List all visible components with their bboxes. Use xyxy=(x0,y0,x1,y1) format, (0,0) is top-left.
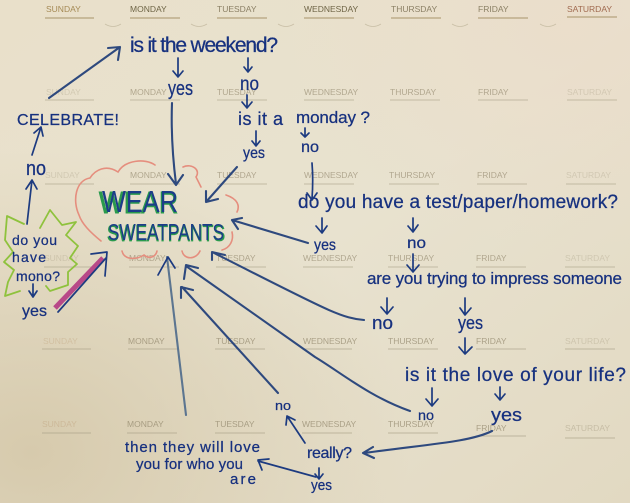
calendar weekday header rows: THURSDAY xyxy=(391,4,437,14)
answer: love yes: yes xyxy=(491,405,522,425)
question: love of your life: is it the love of your life? xyxy=(405,365,626,386)
calendar weekday header rows: TUESDAY xyxy=(216,336,256,346)
question: is it the weekend: is it the weekend? xyxy=(130,34,278,57)
calendar weekday header rows: WEDNESDAY xyxy=(304,87,358,97)
title: wear sweatpants: WEAR xyxy=(102,184,178,219)
calendar weekday header rows: SUNDAY xyxy=(44,253,79,263)
question: do you have mono: mono? xyxy=(16,268,60,284)
answer: love no: no xyxy=(418,407,434,423)
calendar weekday header rows: TUESDAY xyxy=(216,253,256,263)
answer: impress yes: yes xyxy=(458,313,483,333)
calendar weekday header rows: MONDAY xyxy=(128,336,165,346)
calendar weekday header rows: FRIDAY xyxy=(478,87,509,97)
calendar weekday header rows: TUESDAY xyxy=(217,4,257,14)
question: do you have mono xyxy=(12,232,60,284)
calendar weekday header rows: SUNDAY xyxy=(46,87,81,97)
question: is it a monday xyxy=(238,108,370,129)
arrow: love no to sweatpants xyxy=(184,265,410,411)
calendar weekday header rows: SUNDAY xyxy=(45,170,80,180)
arrow: weekend yes to sweatpants xyxy=(168,103,183,185)
calendar weekday header rows xyxy=(42,4,617,438)
arrows: short down arrows xyxy=(29,58,505,479)
calendar weekday header rows: WEDNESDAY xyxy=(304,4,358,14)
text: then they will love you for who you are: you for who you xyxy=(136,456,243,473)
arrow: really no to sweatpants xyxy=(181,287,278,393)
title: wear sweatpants xyxy=(99,184,225,246)
question: really: really? xyxy=(307,445,352,462)
text: then they will love you for who you are xyxy=(125,439,260,488)
calendar weekday header rows: FRIDAY xyxy=(476,253,507,263)
title: wear sweatpants: SWEATPANTS xyxy=(107,220,225,246)
calendar weekday header rows: THURSDAY xyxy=(388,419,434,429)
calendar weekday header rows: SUNDAY xyxy=(43,336,78,346)
title: wear sweatpants: WEAR xyxy=(99,185,178,220)
pink cloud outline xyxy=(76,161,238,258)
calendar weekday header rows: SATURDAY xyxy=(565,336,610,346)
arrow: monday no to do you have xyxy=(307,163,317,200)
calendar weekday header rows: FRIDAY xyxy=(478,4,509,14)
arrow: then they will to sweatpants xyxy=(158,257,186,415)
calendar weekday header rows: MONDAY xyxy=(130,87,167,97)
calendar weekday header rows: THURSDAY xyxy=(388,253,434,263)
arrow: homework yes to sweatpants xyxy=(232,218,308,243)
calendar weekday header rows: SATURDAY xyxy=(565,253,610,263)
calendar weekday header rows: SATURDAY xyxy=(565,423,610,433)
arrow: love yes to really xyxy=(363,431,492,458)
calendar weekday header rows: FRIDAY xyxy=(476,423,507,433)
title: wear sweatpants: SWEATPANTS xyxy=(108,219,224,245)
answer: homework yes: yes xyxy=(314,237,336,254)
text: then they will love you for who you are: then they will love xyxy=(125,439,260,456)
text: then they will love you for who you are: are xyxy=(230,471,256,488)
arrow: mono to no xyxy=(26,180,37,224)
answer: really no: no xyxy=(275,398,291,413)
arrow: really yes to they will love you xyxy=(258,459,316,477)
question: is it a monday: monday ? xyxy=(296,108,370,127)
calendar weekday header rows: WEDNESDAY xyxy=(302,419,356,429)
calendar weekday header rows: MONDAY xyxy=(130,4,167,14)
answer: weekend yes: yes xyxy=(168,78,193,100)
question: do you have mono: have xyxy=(12,249,46,265)
calendar weekday header rows: THURSDAY xyxy=(390,87,436,97)
arrow: celebrate to is it the weekend xyxy=(49,47,120,98)
arrow: no to celebrate xyxy=(32,127,43,155)
answer: mono yes: yes xyxy=(22,303,47,320)
arrow: monday yes to sweatpants xyxy=(206,167,237,202)
calendar weekday header rows: SUNDAY xyxy=(46,4,81,14)
arrow: mono yes to sweatpants xyxy=(55,252,107,312)
answer: impress no: no xyxy=(372,313,393,333)
answer: really yes: yes xyxy=(311,477,332,494)
arrow: impress no to sweatpants xyxy=(212,252,364,320)
answer: homework no: no xyxy=(407,235,426,252)
question: test paper homework: do you have a test/paper/homework? xyxy=(298,192,618,213)
calendar weekday header rows: SATURDAY xyxy=(566,170,611,180)
calendar weekday header rows: MONDAY xyxy=(130,170,167,180)
calendar weekday header rows: FRIDAY xyxy=(477,170,508,180)
calendar weekday header rows: SATURDAY xyxy=(567,87,612,97)
question: impress someone: are you trying to impress someone xyxy=(367,269,622,288)
calendar weekday header rows: TUESDAY xyxy=(217,87,257,97)
calendar weekday header rows: FRIDAY xyxy=(476,336,507,346)
answer: mono no: no xyxy=(26,158,46,180)
calendar weekday header rows: THURSDAY xyxy=(389,170,435,180)
green star outline around mono question xyxy=(4,210,78,296)
calendar weekday header rows: WEDNESDAY xyxy=(303,253,357,263)
arrow: really to no xyxy=(286,416,305,443)
label: celebrate: CELEBRATE! xyxy=(17,112,119,129)
calendar weekday header rows: WEDNESDAY xyxy=(304,170,358,180)
calendar weekday header rows: TUESDAY xyxy=(217,170,257,180)
calendar weekday header rows: WEDNESDAY xyxy=(303,336,357,346)
answer: monday yes: yes xyxy=(243,145,265,162)
question: is it a monday: is it a xyxy=(238,109,284,129)
calendar weekday header rows: SUNDAY xyxy=(42,419,77,429)
calendar weekday header rows: SATURDAY xyxy=(567,4,612,14)
calendar weekday header rows: THURSDAY xyxy=(388,336,434,346)
calendar weekday header rows: MONDAY xyxy=(127,419,164,429)
question: do you have mono: do you xyxy=(12,232,57,248)
calendar weekday header rows: TUESDAY xyxy=(215,419,255,429)
answer: monday no: no xyxy=(301,139,319,156)
calendar weekday header rows: MONDAY xyxy=(129,253,166,263)
answer: weekend no: no xyxy=(240,74,259,95)
